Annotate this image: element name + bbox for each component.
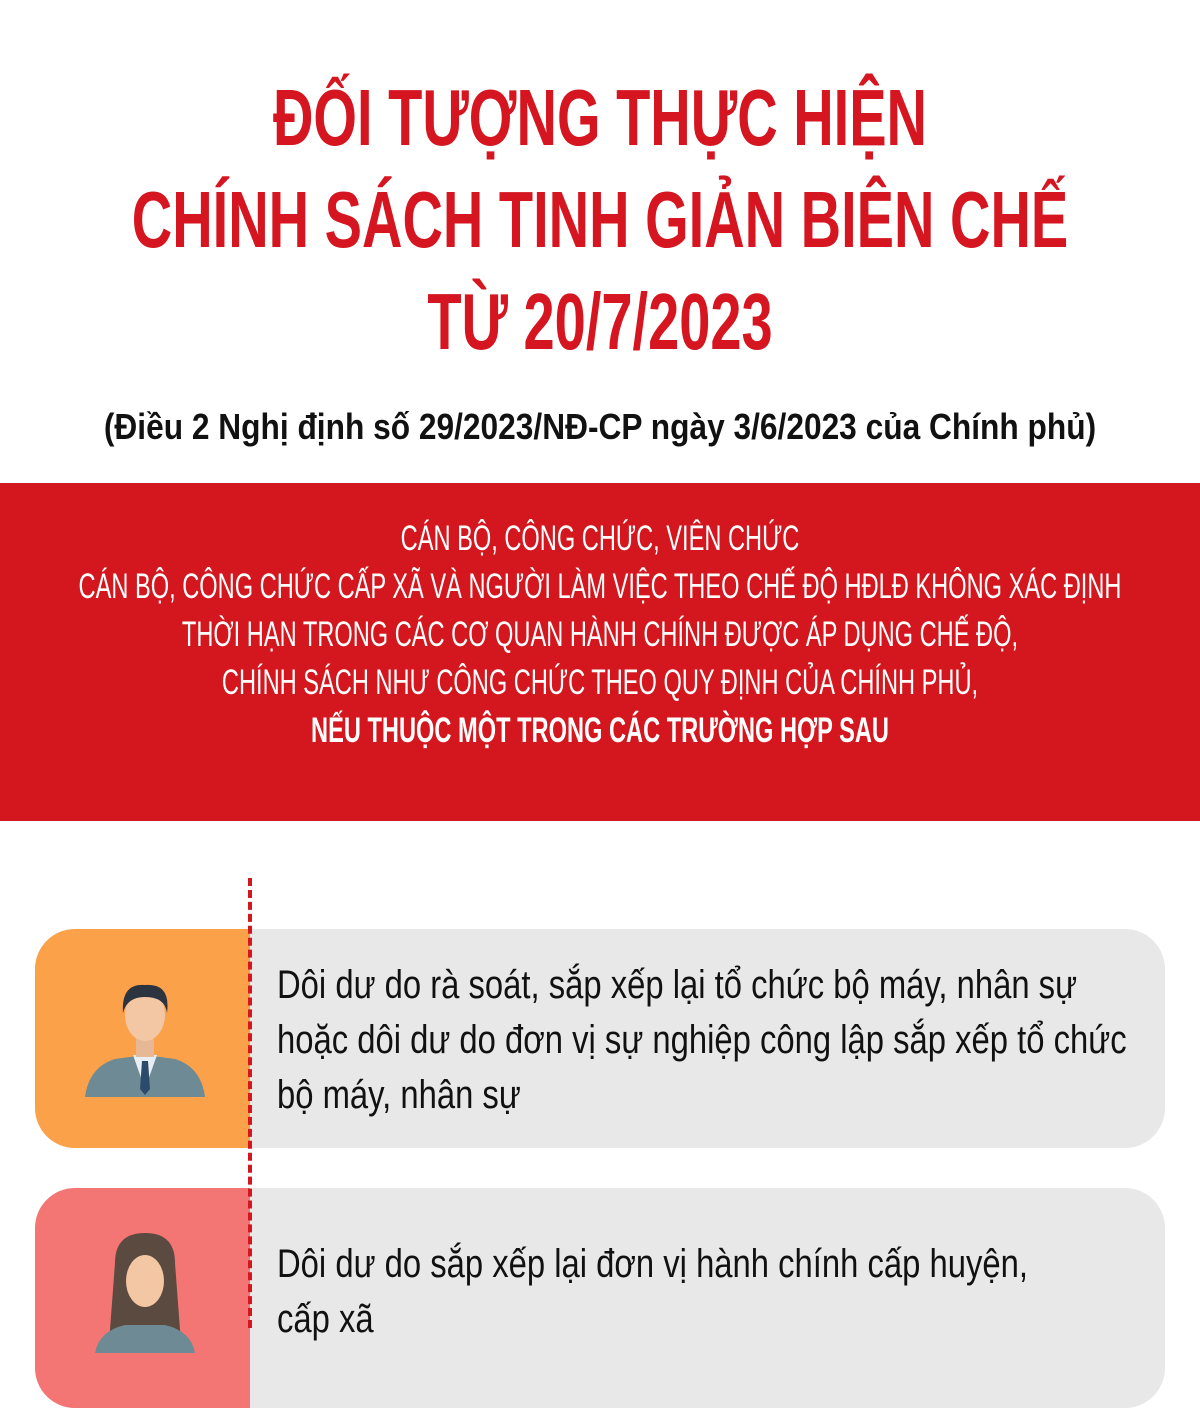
card 1 text: bộ máy, nhân sự [277,1073,521,1117]
title: ĐỐI TƯỢNG THỰC HIỆN [273,73,927,162]
band text: CÁN BỘ, CÔNG CHỨC, VIÊN CHỨC [401,519,799,558]
card 1 text: hoặc dôi dư do đơn vị sự nghiệp công lập sắp xếp tổ chức [277,1018,1127,1062]
icon: woman [95,1233,195,1353]
dashed timeline [248,878,252,1328]
band text: THỜI HẠN TRONG CÁC CƠ QUAN HÀNH CHÍNH ĐƯỢC ÁP DỤNG CHẾ ĐỘ, [182,615,1018,654]
icon: man [85,984,205,1097]
card 2 text: Dôi dư do sắp xếp lại đơn vị hành chính cấp huyện, [277,1242,1028,1286]
card 2 [35,1188,1165,1408]
card 2 text: cấp xã [277,1297,374,1341]
card 1 text: Dôi dư do rà soát, sắp xếp lại tổ chức bộ máy, nhân sự [277,963,1077,1007]
card 1 text [277,963,1127,1117]
panel: red band [0,483,1200,821]
band text: NẾU THUỘC MỘT TRONG CÁC TRƯỜNG HỢP SAU [311,711,889,750]
title [132,73,1068,366]
band text: CHÍNH SÁCH NHƯ CÔNG CHỨC THEO QUY ĐỊNH CỦA CHÍNH PHỦ, [222,663,978,702]
subtitle: (Điều 2 Nghị định số 29/2023/NĐ-CP ngày 3/6/2023 của Chính phủ) [104,406,1096,447]
card 1 [35,929,1165,1148]
title: CHÍNH SÁCH TINH GIẢN BIÊN CHẾ [132,175,1068,264]
band text [79,519,1121,750]
band text: CÁN BỘ, CÔNG CHỨC CẤP XÃ VÀ NGƯỜI LÀM VIỆC THEO CHẾ ĐỘ HĐLĐ KHÔNG XÁC ĐỊNH [79,567,1121,606]
title: TỪ 20/7/2023 [427,277,773,366]
card 2 text [277,1242,1028,1341]
